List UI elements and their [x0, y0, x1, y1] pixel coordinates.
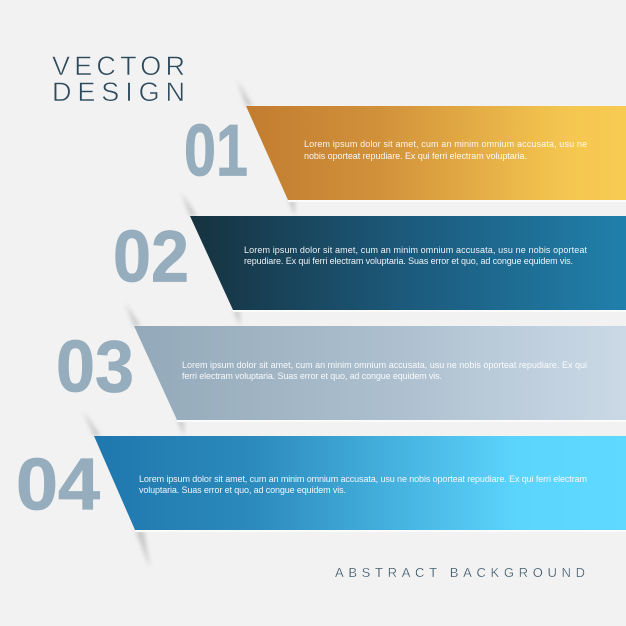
- text 02: Lorem ipsum dolor sit amet, cum an minim omnium accusata, usu ne nobis oporteat: [244, 245, 587, 255]
- fold shadow 01: [237, 80, 295, 216]
- fold shadow 03: [125, 303, 184, 436]
- text 01: Lorem ipsum dolor sit amet, cum an minim omnium accusata, usu ne: [304, 139, 587, 149]
- title: VECTOR: [52, 51, 185, 81]
- panel: item 02: [113, 192, 626, 326]
- band 03: [134, 326, 626, 422]
- text 01: nobis oporteat repudiare. Ex qui ferri electram voluptaria.: [304, 151, 527, 161]
- band 04: [94, 436, 626, 532]
- panel: item 01: [184, 80, 626, 216]
- number 01: 01: [184, 110, 248, 192]
- band 02: [190, 216, 626, 312]
- text 02: repudiare. Ex qui ferri electram voluptaria. Suas error et quo, ad congue equidem vis.: [244, 256, 573, 266]
- text 01: [304, 139, 587, 161]
- text 04: voluptaria. Suas error et quo, ad congue equidem vis.: [139, 485, 346, 495]
- number 04: 04: [16, 444, 100, 526]
- number 03: 03: [56, 326, 134, 408]
- subtitle: ABSTRACT BACKGROUND: [335, 565, 585, 580]
- title: DESIGN: [52, 77, 185, 107]
- text 03: ferri electram voluptaria. Suas error et quo, ad congue equidem vis.: [182, 371, 442, 381]
- text 04: [139, 474, 587, 495]
- text 04: Lorem ipsum dolor sit amet, cum an minim omnium accusata, usu ne nobis oporteat repudiare. Ex qui ferri electram: [139, 474, 587, 484]
- text 03: [182, 360, 587, 381]
- title: [52, 51, 185, 107]
- number 02: 02: [113, 216, 189, 298]
- text 03: Lorem ipsum dolor sit amet, cum an minim omnium accusata, usu ne nobis oporteat repudiare. Ex qui: [182, 360, 587, 370]
- panel: item 03: [56, 303, 626, 436]
- fold shadow 04: [83, 411, 150, 568]
- text 02: [244, 245, 587, 266]
- panel: item 04: [16, 411, 626, 568]
- fold shadow 02: [181, 192, 240, 326]
- band 01: [246, 106, 626, 202]
